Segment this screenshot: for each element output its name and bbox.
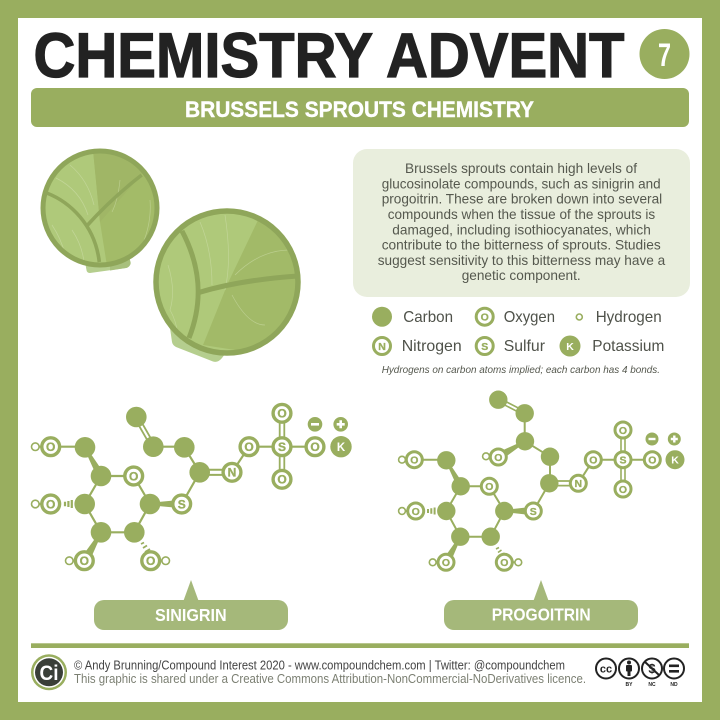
- progoitrin hydrogen atoms: [399, 453, 522, 566]
- sinigrin oxygen, sulfur and nitrogen atoms: O: [310, 440, 320, 454]
- label: sinigrin: [94, 580, 288, 630]
- description panel: Brussels sprouts contain high levels of: [405, 160, 637, 176]
- legend: oxygen: Oxygen: [504, 309, 555, 326]
- sinigrin oxygen, sulfur and nitrogen atoms: O: [146, 554, 155, 568]
- icon: Creative Commons licence badges: [596, 658, 684, 688]
- subtitle banner: BRUSSELS SPROUTS CHEMISTRY: [185, 97, 534, 122]
- badge: ND: ND: [670, 682, 678, 688]
- description panel: compounds when the tissue of the sprouts is: [388, 206, 655, 222]
- legend: carbon: [372, 307, 453, 327]
- legend: nitrogen: [374, 338, 462, 355]
- description panel: progoitrin. These are broken down into several: [382, 191, 662, 207]
- description panel: suggest sensitivity to this bitterness may have a: [378, 252, 665, 268]
- progoitrin oxygen, sulfur and nitrogen atoms: O: [410, 454, 418, 466]
- sinigrin carbon atoms: [74, 407, 210, 543]
- progoitrin oxygen, sulfur and nitrogen atoms: O: [485, 481, 493, 493]
- label: progoitrin: [444, 580, 638, 630]
- legend: sulfur: [476, 338, 546, 355]
- footer divider: [31, 643, 689, 648]
- progoitrin oxygen, sulfur and nitrogen atoms: O: [442, 557, 450, 569]
- sinigrin oxygen, sulfur and nitrogen atoms: S: [278, 440, 286, 454]
- legend: hydrogen: Hydrogen: [596, 309, 662, 326]
- sinigrin hydrogen atoms: [32, 443, 170, 564]
- progoitrin oxygen, sulfur and nitrogen atoms: O: [619, 425, 627, 437]
- progoitrin oxygen, sulfur and nitrogen atoms: O: [494, 452, 502, 464]
- label: sinigrin: SINIGRIN: [155, 605, 227, 625]
- progoitrin oxygen, sulfur and nitrogen atoms: O: [619, 484, 627, 496]
- icon: Compound Interest logo: [31, 654, 67, 690]
- description panel: damaged, including isothiocyanates, which: [392, 221, 651, 237]
- progoitrin bonds: [402, 398, 652, 562]
- legend: nitrogen: N: [378, 341, 386, 353]
- description panel: genetic component.: [462, 267, 581, 283]
- badge: NC: NC: [648, 682, 656, 688]
- sinigrin oxygen, sulfur and nitrogen atoms: O: [129, 469, 138, 483]
- day number badge: [640, 29, 690, 79]
- legend: [372, 307, 664, 376]
- legend: potassium: K: [566, 341, 574, 353]
- credit text: © Andy Brunning/Compound Interest 2020 - www.compoundchem.com | Twitter: @compoundchem: [74, 658, 565, 672]
- legend note: Hydrogens on carbon atoms implied; each carbon has 4 bonds.: [382, 364, 660, 376]
- sinigrin potassium ion and charges: [308, 417, 352, 457]
- progoitrin oxygen, sulfur and nitrogen atoms: O: [648, 454, 656, 466]
- legend: oxygen: O: [481, 312, 489, 324]
- sinigrin oxygen, sulfur and nitrogen atoms: O: [46, 497, 55, 511]
- title: CHEMISTRY ADVENT: [34, 21, 624, 91]
- legend: oxygen: [476, 308, 555, 326]
- progoitrin oxygen, sulfur and nitrogen atoms: O: [589, 454, 597, 466]
- credit text: This graphic is shared under a Creative Commons Attribution-NonCommercial-NoDerivatives licence.: [74, 672, 586, 686]
- progoitrin oxygen, sulfur and nitrogen atoms: [406, 422, 660, 570]
- sinigrin oxygen, sulfur and nitrogen atoms: O: [46, 440, 55, 454]
- sinigrin oxygen, sulfur and nitrogen atoms: [42, 404, 324, 570]
- sinigrin oxygen, sulfur and nitrogen atoms: O: [277, 407, 287, 421]
- progoitrin oxygen, sulfur and nitrogen atoms: O: [412, 506, 420, 518]
- icon: small brussels sprout: [43, 150, 165, 273]
- badge: CC: cc: [600, 664, 612, 676]
- description panel: glucosinolate compounds, such as sinigrin and: [382, 175, 661, 191]
- legend: nitrogen: Nitrogen: [402, 338, 462, 355]
- sinigrin bonds: [35, 413, 315, 561]
- label: progoitrin: PROGOITRIN: [492, 604, 591, 624]
- progoitrin carbon atoms: [437, 390, 559, 546]
- sinigrin oxygen, sulfur and nitrogen atoms: O: [244, 440, 254, 454]
- legend: potassium: Potassium: [592, 338, 664, 355]
- legend: sulfur: Sulfur: [504, 338, 546, 355]
- badge: NC: $: [648, 661, 656, 676]
- progoitrin oxygen, sulfur and nitrogen atoms: N: [575, 478, 582, 490]
- sinigrin potassium ion and charges: K: [337, 442, 346, 454]
- legend: carbon: Carbon: [403, 309, 453, 326]
- molecule: sinigrin: [32, 404, 352, 570]
- legend: sulfur: S: [481, 341, 488, 353]
- badge: NC: [642, 658, 662, 688]
- sinigrin oxygen, sulfur and nitrogen atoms: O: [277, 473, 287, 487]
- progoitrin potassium ion and charges: K: [671, 454, 679, 466]
- badge: BY: BY: [626, 682, 633, 688]
- legend: potassium: [560, 336, 664, 356]
- progoitrin oxygen, sulfur and nitrogen atoms: S: [619, 454, 627, 466]
- description panel: [353, 149, 690, 297]
- molecule: progoitrin: [399, 390, 684, 570]
- progoitrin oxygen, sulfur and nitrogen atoms: O: [500, 557, 508, 569]
- sinigrin oxygen, sulfur and nitrogen atoms: O: [80, 554, 89, 568]
- icon: large brussels sprout: [156, 211, 300, 362]
- subtitle banner: [31, 88, 689, 127]
- sinigrin oxygen, sulfur and nitrogen atoms: N: [228, 466, 236, 480]
- icon: Compound Interest logo: Ci: [40, 662, 58, 685]
- credit text: [74, 658, 586, 686]
- sinigrin oxygen, sulfur and nitrogen atoms: S: [178, 497, 186, 511]
- progoitrin potassium ion and charges: [646, 432, 684, 469]
- description panel: contribute to the bitterness of sprouts. Studies: [382, 237, 661, 253]
- day number badge: 7: [658, 37, 671, 73]
- progoitrin oxygen, sulfur and nitrogen atoms: S: [530, 506, 537, 518]
